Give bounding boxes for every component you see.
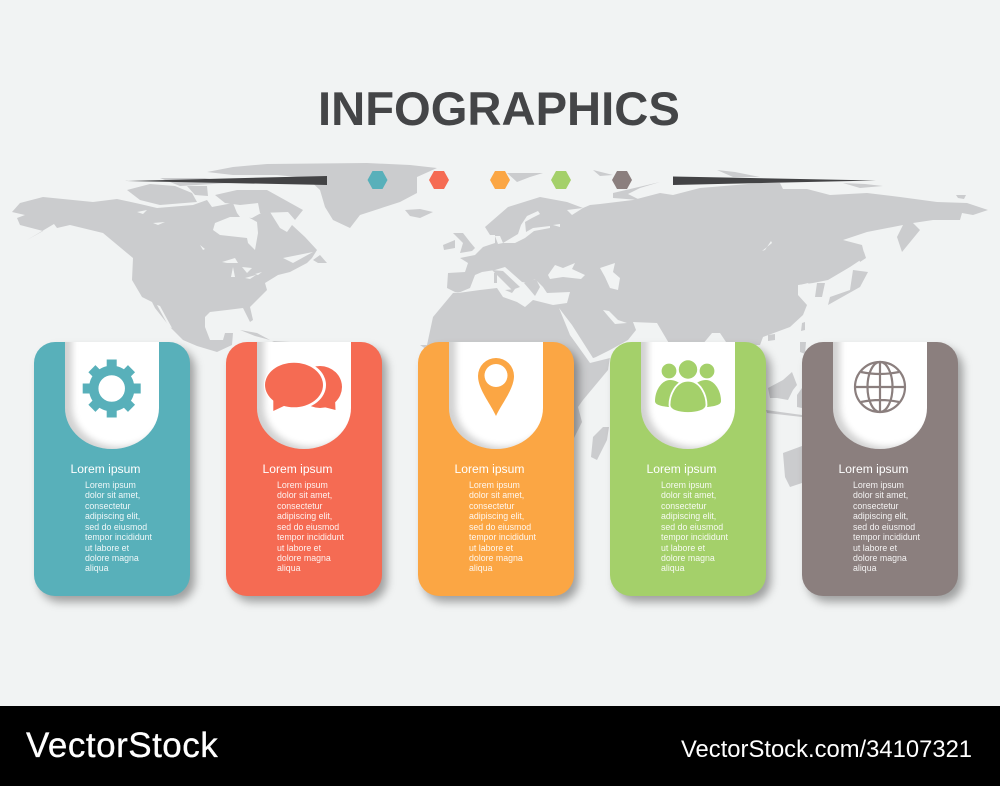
hexagon row [368, 171, 632, 189]
icon: speech bubbles [264, 362, 342, 411]
icon: globe [854, 360, 906, 414]
text block: sed do eiusmod [277, 522, 339, 532]
text block: aliqua [661, 563, 684, 573]
text block: ut labore et [853, 543, 897, 553]
text block: adipiscing elit, [469, 511, 524, 521]
text block: ut labore et [85, 543, 129, 553]
text block: dolor sit amet, [469, 490, 524, 500]
panel: coral card [226, 342, 382, 596]
text block: dolor sit amet, [277, 490, 332, 500]
text block: consectetur [661, 501, 706, 511]
panel: teal card [34, 342, 190, 596]
right wedge arrow [673, 176, 875, 185]
text block: Lorem ipsum [85, 480, 136, 490]
heading: Lorem ipsum [70, 462, 140, 476]
text block: dolore magna [469, 553, 523, 563]
text block: Lorem ipsum [469, 480, 520, 490]
text block: tempor incididunt [85, 532, 152, 542]
text block: sed do eiusmod [85, 522, 147, 532]
text block: consectetur [277, 501, 322, 511]
text block: dolore magna [85, 553, 139, 563]
text block [661, 480, 728, 573]
text block: tempor incididunt [661, 532, 728, 542]
icon: gear [82, 360, 141, 418]
text block: Lorem ipsum [661, 480, 712, 490]
text block: adipiscing elit, [661, 511, 716, 521]
text block: sed do eiusmod [661, 522, 723, 532]
panel: taupe card [802, 342, 958, 596]
text block: Lorem ipsum [277, 480, 328, 490]
text block: sed do eiusmod [853, 522, 915, 532]
text block: tempor incididunt [277, 532, 344, 542]
text block: aliqua [85, 563, 108, 573]
heading: Lorem ipsum [646, 462, 716, 476]
text block [277, 480, 344, 573]
text block: tempor incididunt [853, 532, 920, 542]
text block: aliqua [469, 563, 492, 573]
heading: Lorem ipsum [262, 462, 332, 476]
title: INFOGRAPHICS [318, 83, 680, 136]
text block [85, 480, 152, 573]
text block: consectetur [85, 501, 130, 511]
icon: location pin [478, 358, 514, 416]
text block: adipiscing elit, [277, 511, 332, 521]
heading: Lorem ipsum [454, 462, 524, 476]
text block: dolor sit amet, [85, 490, 140, 500]
text block: dolore magna [661, 553, 715, 563]
text block: consectetur [469, 501, 514, 511]
text block: Lorem ipsum [853, 480, 904, 490]
panel: green card [610, 342, 766, 596]
text block: adipiscing elit, [85, 511, 140, 521]
text block: dolore magna [277, 553, 331, 563]
text block: ut labore et [661, 543, 705, 553]
text block: tempor incididunt [469, 532, 536, 542]
text block: dolore magna [853, 553, 907, 563]
footer bar [0, 706, 1000, 786]
text block: ut labore et [469, 543, 513, 553]
footer image id: VectorStock.com/34107321 [681, 736, 972, 763]
panel: orange card [418, 342, 574, 596]
left wedge arrow [126, 176, 327, 185]
text block: aliqua [853, 563, 876, 573]
footer logo: VectorStock [26, 726, 218, 765]
text block [469, 480, 536, 573]
text block: aliqua [277, 563, 300, 573]
text block: dolor sit amet, [661, 490, 716, 500]
text block: adipiscing elit, [853, 511, 908, 521]
heading: Lorem ipsum [838, 462, 908, 476]
icon: people group [655, 360, 721, 412]
text block: dolor sit amet, [853, 490, 908, 500]
text block: ut labore et [277, 543, 321, 553]
text block: sed do eiusmod [469, 522, 531, 532]
text block [853, 480, 920, 573]
text block: consectetur [853, 501, 898, 511]
